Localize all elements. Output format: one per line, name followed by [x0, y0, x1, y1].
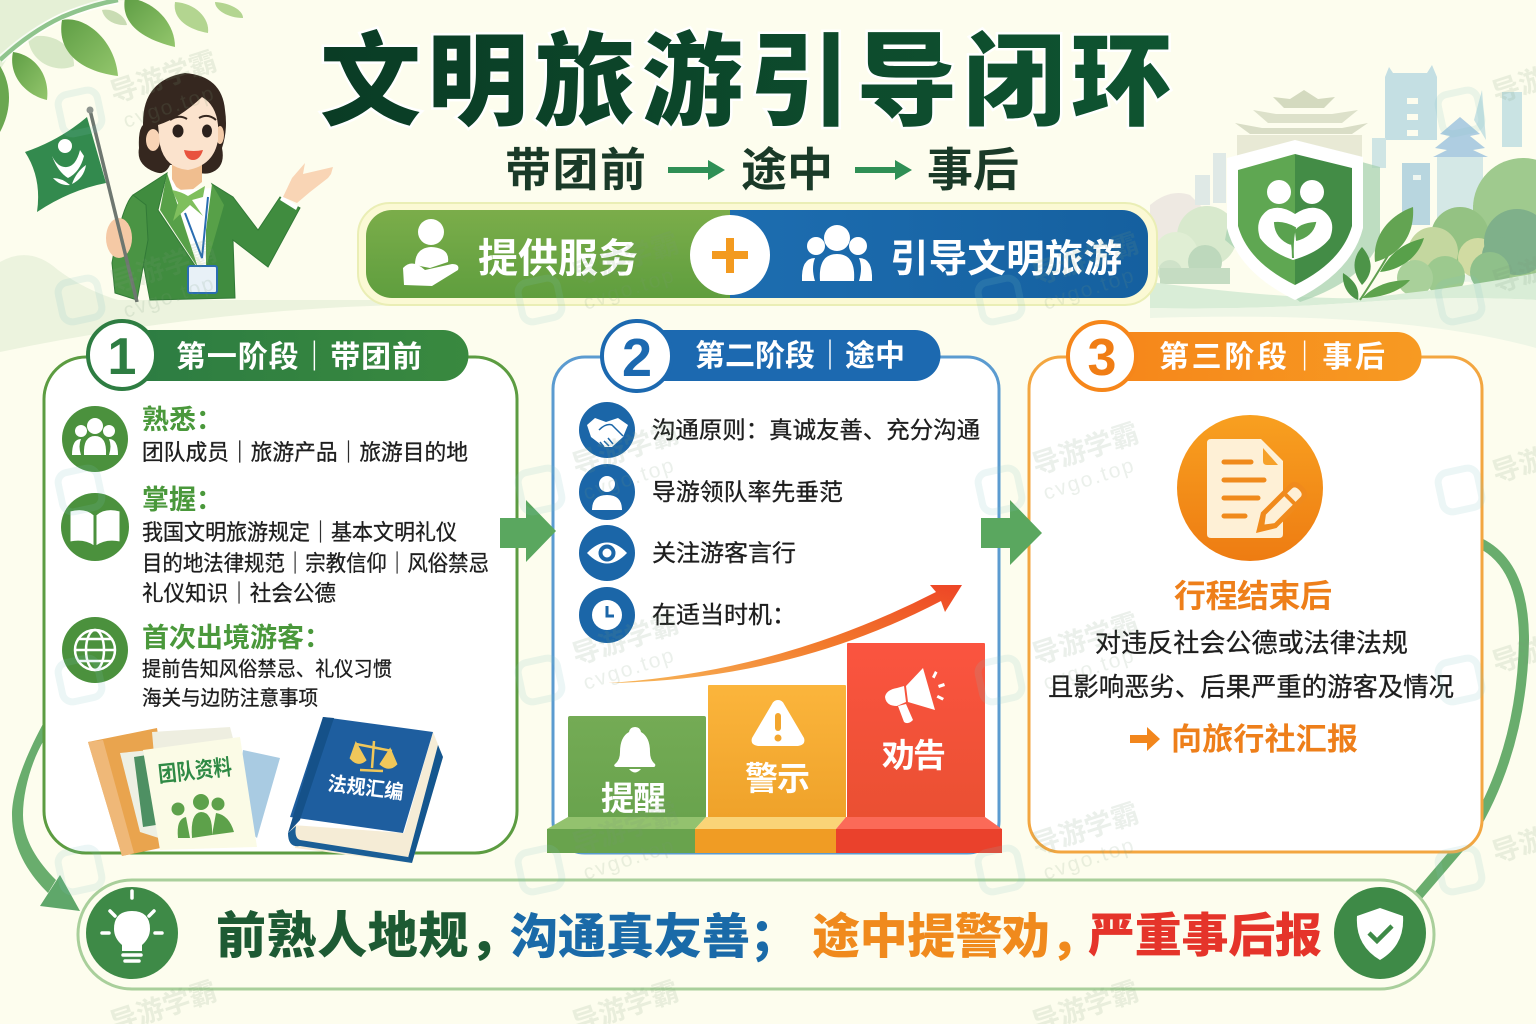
watermarks: 导游学霸	[106, 235, 220, 299]
lapel	[160, 173, 224, 268]
rising arrow	[608, 585, 962, 683]
bottom edge	[288, 826, 412, 863]
base top: orange	[695, 817, 846, 829]
fold	[1263, 448, 1278, 465]
base front: orange	[695, 829, 836, 853]
arrow: stage 1 to 2	[500, 500, 556, 562]
panel 2: during the tour	[547, 321, 1002, 853]
illustration: tour guide	[25, 73, 333, 302]
watermarks: cvgo.top	[1040, 643, 1138, 695]
illustration: team documents	[88, 727, 280, 856]
icon: shield check	[1334, 887, 1426, 979]
arrow: stage 2 to 3	[981, 500, 1042, 565]
watermarks: 导游学霸	[568, 227, 682, 291]
paper	[1207, 439, 1283, 538]
panel 1: before the tour	[44, 321, 517, 863]
bars: escalation steps	[547, 643, 1002, 853]
cuff	[280, 196, 298, 210]
shirt	[168, 172, 212, 265]
branch	[0, 0, 118, 60]
heading: master: 掌握：	[142, 485, 223, 515]
text: condition	[1048, 628, 1454, 702]
loop arrow: left	[12, 722, 80, 911]
back cover edge	[408, 745, 443, 863]
eye left	[172, 124, 184, 138]
card	[143, 737, 257, 850]
flag pole	[90, 110, 137, 302]
watermarks: 导游学霸	[568, 607, 682, 671]
text: first time lines	[142, 658, 392, 710]
text: guidance: 引导文明旅游	[890, 238, 1122, 281]
watermarks: cvgo.top	[580, 643, 678, 695]
slogan: part 3: 途中提警劝，	[812, 911, 1098, 964]
shield left half	[1238, 154, 1295, 285]
leaf	[12, 52, 47, 100]
face	[158, 97, 218, 170]
heading: first time abroad: 首次出境游客：	[142, 623, 331, 653]
text: first time lines: 提前告知风俗禁忌、礼仪习惯	[142, 658, 392, 681]
illustration: bushes	[1154, 158, 1536, 296]
text: right moment: 在适当时机：	[652, 602, 796, 629]
base top: green	[547, 817, 706, 829]
left ear	[146, 129, 160, 151]
slogan: part 2: 沟通真友善；	[510, 911, 798, 964]
number: 3	[1088, 329, 1116, 387]
title: 文明旅游引导闭环	[320, 27, 1172, 139]
text: lead by example: 导游领队率先垂范	[652, 479, 843, 505]
icon: document and pencil	[1177, 415, 1323, 561]
icon: bulb	[86, 887, 178, 979]
icon: handshake	[579, 402, 635, 458]
branch	[1343, 207, 1424, 300]
text: service: 提供服务	[478, 237, 638, 281]
bar: remind	[568, 716, 706, 818]
header pill	[640, 330, 941, 381]
brows	[170, 116, 216, 120]
hair back	[139, 73, 226, 174]
scales icon	[351, 741, 396, 771]
pages	[292, 732, 443, 863]
header pill	[1105, 332, 1422, 381]
left hand	[106, 218, 132, 258]
jacket body	[133, 173, 300, 300]
people icon	[172, 794, 234, 838]
shield white	[1227, 140, 1363, 300]
pole cap	[86, 106, 94, 114]
mouth	[184, 150, 203, 160]
subtitle flow: 带团前	[505, 144, 646, 196]
panel 3: after the tour	[1029, 322, 1482, 852]
number badge	[88, 321, 156, 389]
leaf	[61, 19, 118, 76]
dashed line	[215, 978, 1325, 980]
illustration: city skyline	[1150, 65, 1522, 255]
illustration: top-left leaves	[0, 0, 243, 132]
paper back	[152, 727, 236, 755]
banner: service and guidance	[358, 203, 1157, 305]
left sleeve	[112, 195, 148, 300]
watermarks: cvgo.top	[120, 271, 218, 323]
spine	[288, 717, 334, 833]
badge	[188, 266, 217, 293]
background: pale hills	[0, 0, 400, 352]
text: familiar: 团队成员｜旅游产品｜旅游目的地	[142, 440, 468, 465]
base top: red	[836, 817, 1002, 829]
subtitle flow	[505, 144, 1019, 196]
bar: warn	[708, 685, 846, 818]
watermarks: 导游学霸	[568, 417, 682, 481]
spine	[88, 740, 134, 856]
inner paper	[120, 750, 165, 840]
label: 法规汇编	[326, 771, 405, 804]
blue doc	[235, 750, 280, 838]
loop arrow: right	[1416, 543, 1524, 898]
plus circle	[690, 215, 770, 295]
text: master lines: 我国文明旅游规定｜基本文明礼仪	[142, 520, 457, 545]
leaf	[124, 0, 175, 47]
orange folder	[88, 728, 175, 856]
subtitle flow: 途中	[741, 144, 833, 196]
icon: caring hand	[403, 219, 458, 286]
watermarks: cvgo.top	[1040, 453, 1138, 505]
number: 2	[622, 328, 652, 388]
header text: 第二阶段｜途中	[695, 340, 905, 373]
right ear	[216, 126, 224, 144]
watermarks: cvgo.top	[580, 453, 678, 505]
icon: clock	[579, 587, 635, 643]
watermarks: 导游学霸	[1028, 417, 1142, 481]
cover	[290, 717, 433, 833]
number badge	[602, 321, 672, 391]
sprout	[1275, 223, 1315, 258]
watermarks: cvgo.top	[120, 81, 218, 133]
green strip	[134, 755, 156, 827]
leaf	[0, 66, 9, 132]
header text: 第三阶段｜事后	[1159, 341, 1385, 374]
text: observe tourists: 关注游客言行	[652, 540, 796, 566]
emblem: shield	[1225, 140, 1424, 302]
pale leaf	[102, 10, 127, 25]
left arrow head	[40, 875, 80, 911]
flag emblem	[52, 139, 86, 185]
text: master lines: 目的地法律规范｜宗教信仰｜风俗禁忌	[142, 551, 489, 576]
slogan: part 1: 前熟人地规，	[216, 908, 519, 964]
ground bands	[1150, 273, 1536, 348]
icon: people group	[802, 225, 872, 281]
label: warn: 警示	[745, 760, 810, 797]
icon: warning	[752, 700, 804, 746]
illustration: law book	[288, 717, 443, 863]
watermarks: cvgo.top	[580, 833, 678, 885]
leaf	[175, 2, 208, 33]
heading: familiar: 熟悉：	[142, 404, 223, 435]
base front: red	[836, 829, 1002, 853]
pagoda	[1235, 90, 1368, 163]
watermarks: 导游学霸	[1028, 797, 1142, 861]
icon: megaphone	[885, 668, 945, 723]
text: master lines	[142, 520, 489, 606]
watermarks: 导游学霸	[106, 45, 220, 109]
plus sign	[712, 238, 748, 273]
leaf	[215, 2, 243, 18]
neck	[172, 160, 202, 194]
blue pagoda	[1433, 117, 1488, 227]
icon: book	[61, 493, 129, 561]
icon: globe	[62, 617, 128, 683]
left half	[366, 210, 730, 298]
lanyard	[185, 197, 208, 258]
header pill	[120, 330, 468, 381]
pencil	[1248, 479, 1310, 541]
scarf	[172, 186, 205, 221]
icon: person	[579, 464, 635, 520]
right hand	[283, 163, 333, 203]
number: 1	[108, 328, 136, 386]
text: condition: 且影响恶劣、后果严重的游客及情况	[1048, 672, 1454, 702]
watermarks: 导游学霸	[568, 797, 682, 861]
text: report: 向旅行社汇报	[1171, 722, 1358, 757]
shield right half	[1295, 154, 1352, 285]
icon: team	[62, 406, 128, 472]
watermarks: 导游学霸	[1028, 607, 1142, 671]
small arrow	[1130, 727, 1160, 751]
heading: after the trip: 行程结束后	[1174, 578, 1332, 614]
slogan: part 4: 严重事后报	[1088, 909, 1322, 962]
base front: green	[547, 829, 695, 853]
watermarks: cvgo.top	[580, 263, 678, 315]
card label: 团队资料	[157, 754, 233, 787]
subtitle flow: 事后	[927, 144, 1019, 196]
arrow 1	[668, 160, 725, 180]
text: communication: 沟通原则：真诚友善、充分沟通	[652, 417, 980, 443]
bar: dissuade	[847, 643, 985, 818]
header text: 第一阶段｜带团前	[176, 341, 422, 374]
number badge	[1068, 322, 1136, 390]
label: remind: 提醒	[601, 780, 666, 817]
label: dissuade: 劝告	[882, 737, 946, 774]
text: master lines: 礼仪知识｜社会公德	[142, 581, 336, 606]
icon: eye	[579, 525, 635, 581]
bottom slogan bar	[78, 880, 1434, 989]
watermarks: cvgo.top	[1040, 263, 1138, 315]
flag	[25, 117, 106, 212]
arrow 2	[855, 160, 912, 180]
figures	[1258, 180, 1332, 260]
watermarks: 导游学霸	[1028, 227, 1142, 291]
eye right	[202, 124, 212, 138]
icon: bell	[614, 727, 655, 772]
text: first time lines: 海关与边防注意事项	[142, 687, 318, 710]
right half	[730, 210, 1148, 298]
lines	[1224, 462, 1264, 516]
watermarks: cvgo.top	[1040, 833, 1138, 885]
text: condition: 对违反社会公德或法律法规	[1095, 628, 1408, 658]
